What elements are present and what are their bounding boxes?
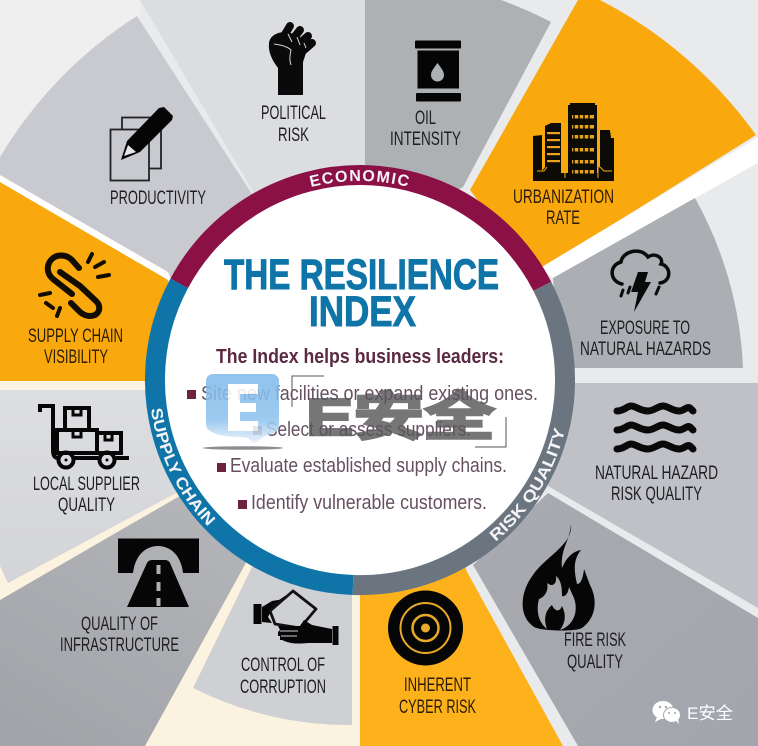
icon: city buildings [533,103,614,181]
label: fire risk quality [564,630,626,673]
label: exposure to natural hazards: NATURAL HAZARDS [580,339,711,360]
label: urbanization rate: URBANIZATION [513,187,614,208]
label: natural hazard risk quality [595,463,718,505]
icon: storm cloud [612,251,669,312]
panel: local supplier quality [0,390,178,583]
icon: flame [523,524,595,631]
title: INDEX [309,288,416,336]
ring segment: economic: ECONOMIC [310,170,409,187]
central white disc [163,184,557,578]
panel: control of corruption [193,565,352,725]
icon: raised fist [269,26,312,95]
watermark: E security logo: E安全 [306,389,495,447]
label: quality of infrastructure: INFRASTRUCTURE [60,635,179,656]
label: oil intensity: INTENSITY [390,129,461,150]
icon: waves [617,406,693,449]
ring segment: supply chain: SUPPLY CHAIN [152,408,216,526]
bullet list: Evaluate established supply chains. [230,455,507,477]
panel: fire risk quality [473,493,758,746]
icon: broken chain link [40,254,109,316]
label: inherent cyber risk [399,675,476,718]
label: exposure to natural hazards [580,318,711,360]
panel: productivity [0,16,252,290]
ring segment: economic [170,165,552,291]
label: fire risk quality: FIRE RISK [564,630,626,651]
bullet list [187,383,538,514]
label: urbanization rate [513,187,614,229]
label: oil intensity: OIL [415,108,436,129]
panel: political risk [140,0,365,200]
label: quality of infrastructure [60,614,179,656]
ring segment: risk quality [352,282,575,596]
label: supply chain visibility [28,326,123,368]
label: political risk: RISK [278,125,309,146]
label: exposure to natural hazards: EXPOSURE TO [600,318,690,339]
label: political risk: POLITICAL [261,103,326,124]
panel: natural hazard risk quality [548,383,758,608]
icon: oil barrel [415,40,461,102]
label: urbanization rate: RATE [546,208,580,229]
bullet list: Identify vulnerable customers. [251,492,487,514]
label: control of corruption [240,655,326,698]
label: natural hazard risk quality: RISK QUALITY [611,484,702,505]
icon: hand truck with boxes [40,406,129,468]
ring segment: supply chain [144,278,354,595]
icon: pencil and paper [110,107,173,180]
label: fire risk quality: QUALITY [567,652,623,673]
panel: supply chain visibility [0,175,185,381]
label: local supplier quality [33,474,140,516]
label: inherent cyber risk: CYBER RISK [399,697,476,718]
label: quality of infrastructure: QUALITY OF [81,614,158,635]
icon: hands exchanging bribe [254,591,338,645]
label: inherent cyber risk: INHERENT [404,675,471,696]
watermark: E security logo [203,374,506,450]
label: local supplier quality: LOCAL SUPPLIER [33,474,140,495]
panel: quality of infrastructure [0,490,250,746]
label: supply chain visibility: SUPPLY CHAIN [28,326,123,347]
panel: inherent cyber risk [360,560,563,746]
ring segment: risk quality: RISK QUALITY [489,427,564,541]
watermark: wechat account [652,701,733,724]
label: oil intensity [390,108,461,150]
panel: exposure to natural hazards [553,198,743,368]
label: control of corruption: CONTROL OF [241,655,325,676]
label: control of corruption: CORRUPTION [240,677,326,698]
panel: oil intensity [365,0,551,200]
label: productivity: PRODUCTIVITY [110,188,206,209]
bullet list: Site new facilities or expand existing ones. [201,383,538,405]
watermark: wechat account: E安全 [687,704,733,723]
label: local supplier quality: QUALITY [58,495,115,516]
label: supply chain visibility: VISIBILITY [44,347,108,368]
icon: road tunnel [118,538,199,607]
title: THE RESILIENCE [224,251,499,299]
label: political risk [261,103,326,146]
title [224,251,499,336]
icon: target [388,590,463,666]
subheading: The Index helps business leaders: [216,346,504,368]
panel: urbanization rate [470,0,758,278]
bullet list: Select or assess suppliers. [266,419,471,441]
